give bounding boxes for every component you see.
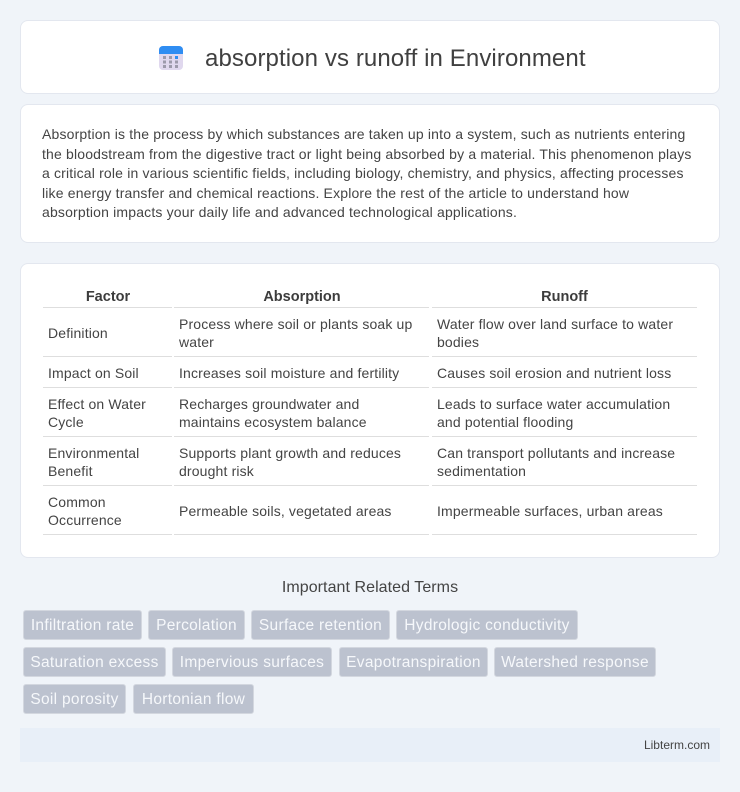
row: common occurrence: Common — [48, 494, 106, 510]
row: definition: water — [179, 334, 214, 350]
panel: related term tags — [23, 610, 656, 714]
row: environmental benefit: Benefit — [48, 463, 93, 479]
panel: intro text — [20, 104, 720, 243]
text block: intro paragraph: a critical role in various scientific fields, including biology, chemistry, and physics, affecting processes — [42, 165, 684, 181]
panel: related term tags: Infiltration rate — [31, 617, 134, 634]
table header: Runoff — [541, 289, 588, 305]
row: definition: Process where soil or plants soak up — [179, 316, 412, 332]
table header: Factor — [86, 289, 130, 305]
heading: related terms: Important Related Terms — [282, 579, 458, 596]
row: definition: Definition — [48, 325, 108, 341]
row: environmental benefit: Supports plant growth and reduces — [179, 445, 401, 461]
text block: intro paragraph: like energy transfer and chemical reactions. Explore the rest of the article to understand how — [42, 184, 629, 200]
row: common occurrence: Impermeable surfaces, urban areas — [437, 503, 663, 519]
icon: calendar — [159, 46, 183, 70]
row: effect on water cycle: Leads to surface water accumulation — [437, 396, 670, 412]
row: impact on soil — [48, 365, 671, 381]
row: common occurrence: Occurrence — [48, 512, 122, 528]
row: definition: Water flow over land surface to water — [437, 316, 673, 332]
panel: related term tags: Watershed response — [501, 654, 649, 671]
row: environmental benefit: sedimentation — [437, 463, 526, 479]
row: common occurrence: Permeable soils, vegetated areas — [179, 503, 392, 519]
row: environmental benefit: Environmental — [48, 445, 139, 461]
row: impact on soil: Causes soil erosion and nutrient loss — [437, 365, 671, 381]
panel: comparison table — [20, 263, 720, 558]
panel: related term tags: Hortonian flow — [142, 691, 245, 708]
row: effect on water cycle: and potential flooding — [437, 414, 573, 430]
row: environmental benefit — [48, 445, 675, 479]
text block: intro paragraph — [42, 126, 692, 220]
row: impact on soil: Increases soil moisture and fertility — [179, 365, 399, 381]
footer credit: Libterm.com — [644, 738, 710, 752]
row: impact on soil: Impact on Soil — [48, 365, 139, 381]
text block: intro paragraph: Absorption is the process by which substances are taken up into a system, such as nutrients entering — [42, 126, 685, 142]
row: definition: bodies — [437, 334, 479, 350]
row: definition — [48, 316, 673, 350]
row: effect on water cycle — [48, 396, 670, 430]
panel: title header — [20, 20, 720, 94]
row: effect on water cycle: Effect on Water — [48, 396, 146, 412]
table header: Absorption — [263, 289, 341, 305]
table header — [86, 289, 588, 305]
text block: intro paragraph: the bloodstream from the digestive tract or light being absorbed by a material. This phenomenon plays — [42, 146, 692, 162]
panel: related term tags: Saturation excess — [30, 654, 159, 671]
row: environmental benefit: drought risk — [179, 463, 254, 479]
panel: related term tags: Hydrologic conductivity — [404, 617, 570, 634]
text block: intro paragraph: absorption impacts your daily life and advanced technological applications. — [42, 204, 517, 220]
row: environmental benefit: Can transport pollutants and increase — [437, 445, 675, 461]
row: common occurrence — [48, 494, 663, 528]
row: effect on water cycle: Cycle — [48, 414, 84, 430]
panel: related term tags: Impervious surfaces — [180, 654, 324, 671]
panel: related term tags: Soil porosity — [30, 691, 119, 708]
panel: related term tags: Surface retention — [259, 617, 382, 634]
panel: related term tags: Evapotranspiration — [346, 654, 481, 671]
title: absorption vs runoff in Environment — [205, 45, 586, 72]
row: effect on water cycle: maintains ecosystem balance — [179, 414, 367, 430]
footer bar — [20, 728, 720, 762]
panel: related term tags: Percolation — [156, 617, 237, 634]
row: effect on water cycle: Recharges groundwater and — [179, 396, 359, 412]
